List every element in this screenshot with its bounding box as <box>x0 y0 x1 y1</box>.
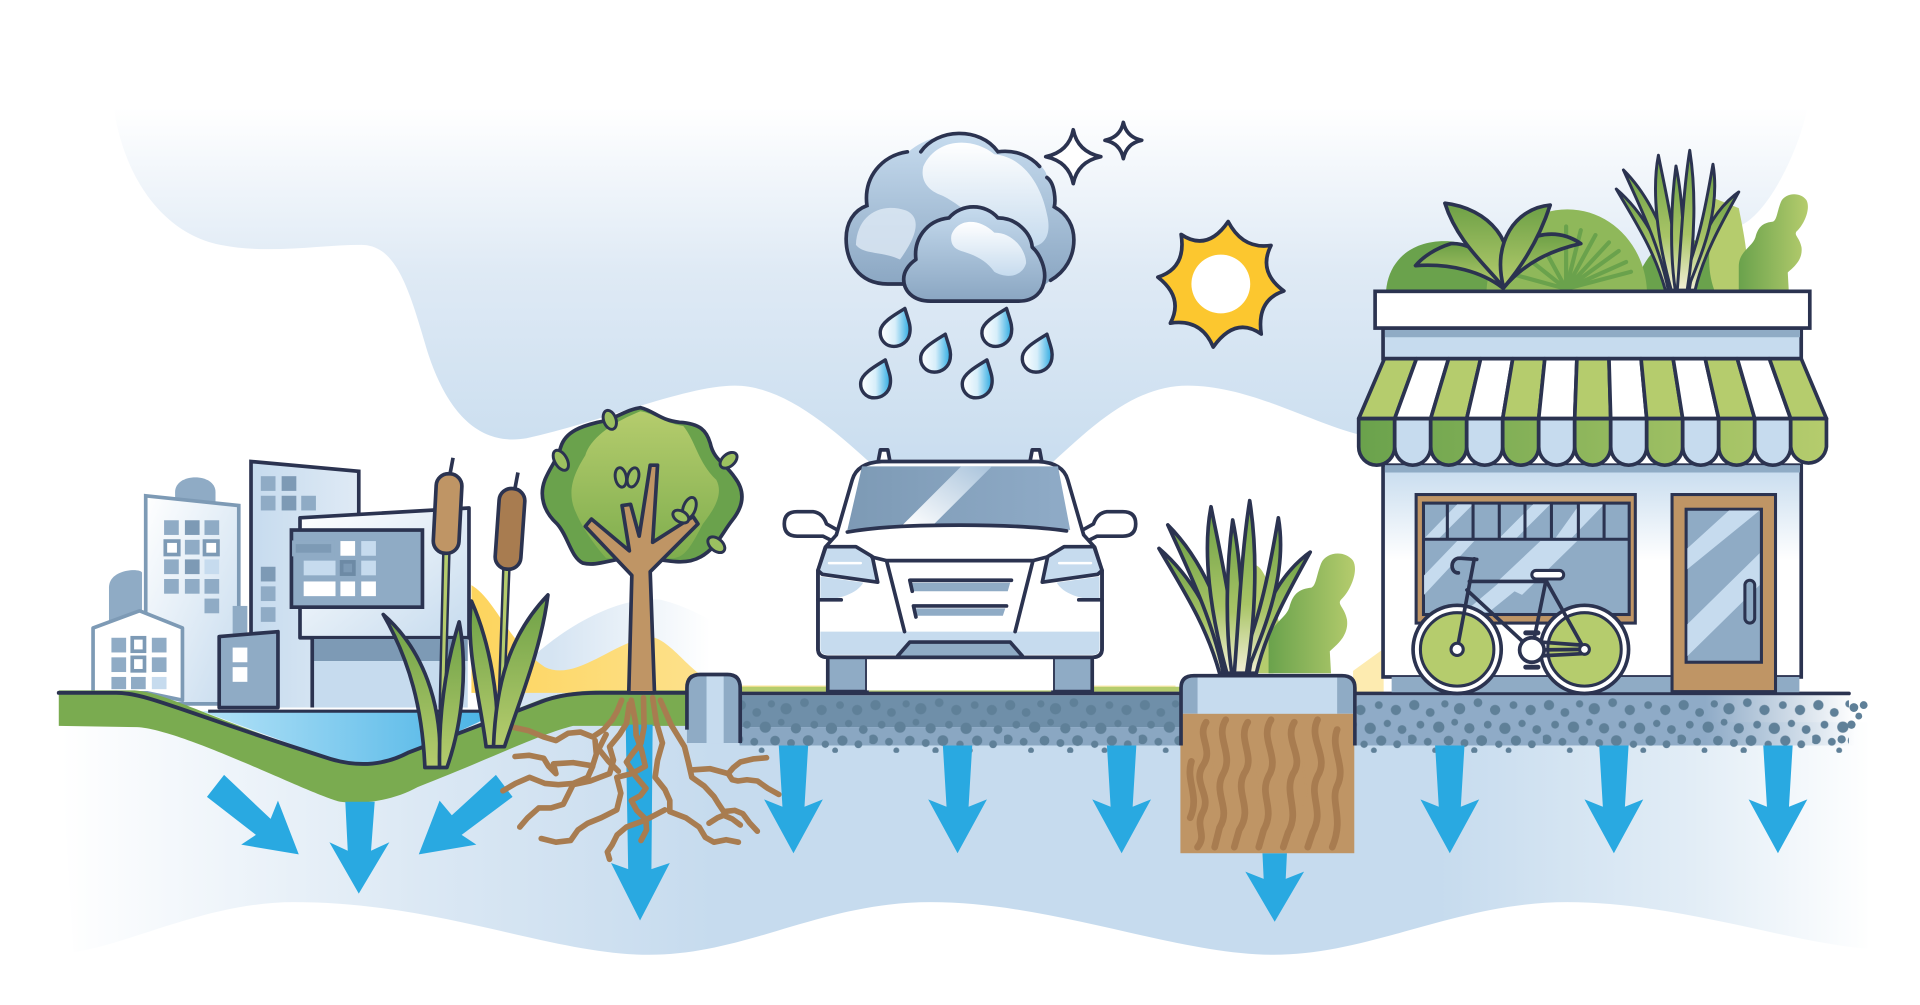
shop door <box>1672 495 1776 692</box>
arrow down 6 <box>1749 745 1807 853</box>
sparkle stars <box>1046 122 1142 184</box>
roof slab <box>1375 291 1810 328</box>
cattails and reeds <box>383 458 548 768</box>
crown highlight <box>571 411 719 558</box>
planter grass <box>1159 501 1310 673</box>
car wheels <box>828 655 1092 692</box>
arrow down pond <box>329 802 389 894</box>
cloud highlight <box>923 143 1049 246</box>
buildings cluster <box>93 461 469 708</box>
tree <box>503 408 779 859</box>
small dark box building <box>219 632 278 708</box>
car grille <box>872 557 1047 632</box>
arrow down planter <box>1245 853 1304 922</box>
car windshield <box>847 466 1070 530</box>
leafy plant <box>1416 203 1581 288</box>
car body <box>818 461 1102 657</box>
small cloud highlight <box>951 222 1026 276</box>
tree leaves <box>550 409 740 556</box>
car mirrors <box>784 512 1136 544</box>
gravel strip right <box>1357 695 1868 753</box>
car <box>784 450 1136 692</box>
arrow down 3 <box>1092 745 1151 853</box>
modern overhang building <box>291 508 469 708</box>
car headlights <box>818 547 1102 582</box>
roof garden <box>1386 150 1808 290</box>
cattail 2 <box>494 473 526 747</box>
tall blue building <box>251 461 359 708</box>
planter cap <box>1180 676 1354 714</box>
bioretention planter <box>1180 676 1355 853</box>
arrow down 5 <box>1584 745 1643 853</box>
planter bush <box>1239 554 1355 673</box>
small house <box>93 611 182 700</box>
sky background <box>114 108 1807 468</box>
cloud small <box>904 207 1045 301</box>
car lower bumper <box>820 632 1100 655</box>
tree crown <box>542 408 742 564</box>
car antennas <box>878 450 1042 463</box>
cloud big <box>846 133 1074 288</box>
underground water table <box>59 722 1867 955</box>
store <box>1359 150 1826 693</box>
arrow down 2 <box>928 745 987 853</box>
arrow down tree <box>611 725 670 921</box>
green swale ground <box>59 690 689 803</box>
sun <box>1158 222 1284 347</box>
arrow down 4 <box>1420 745 1479 853</box>
roof grass <box>1616 150 1739 290</box>
awning <box>1359 359 1826 465</box>
gravel strip left <box>740 695 1182 753</box>
tree trunk and branches <box>585 465 698 693</box>
store base <box>1392 677 1799 692</box>
tree roots <box>503 698 779 859</box>
infiltration arrows <box>207 725 1807 922</box>
cloud outline <box>846 133 1074 284</box>
awning scallops <box>1359 419 1826 465</box>
drain curb <box>687 674 740 743</box>
tall white building <box>146 496 247 704</box>
store wall <box>1383 465 1801 677</box>
bike frame <box>1452 558 1584 656</box>
fascia <box>1383 328 1801 359</box>
cattail 1 <box>433 458 463 768</box>
background hills <box>471 585 1384 710</box>
roof shrubs <box>1386 241 1500 290</box>
back building domes <box>109 477 216 624</box>
raindrops <box>861 308 1052 398</box>
arrow diagonal left <box>207 775 299 854</box>
shop window <box>1416 495 1635 623</box>
pond <box>202 711 502 765</box>
bike wheels <box>1413 605 1629 693</box>
ground line <box>689 692 1849 695</box>
arrow diagonal right <box>419 775 513 854</box>
reed leaves <box>383 595 548 768</box>
arrow down 1 <box>764 745 823 853</box>
soil with roots <box>1180 714 1354 853</box>
bicycle <box>1413 558 1629 693</box>
